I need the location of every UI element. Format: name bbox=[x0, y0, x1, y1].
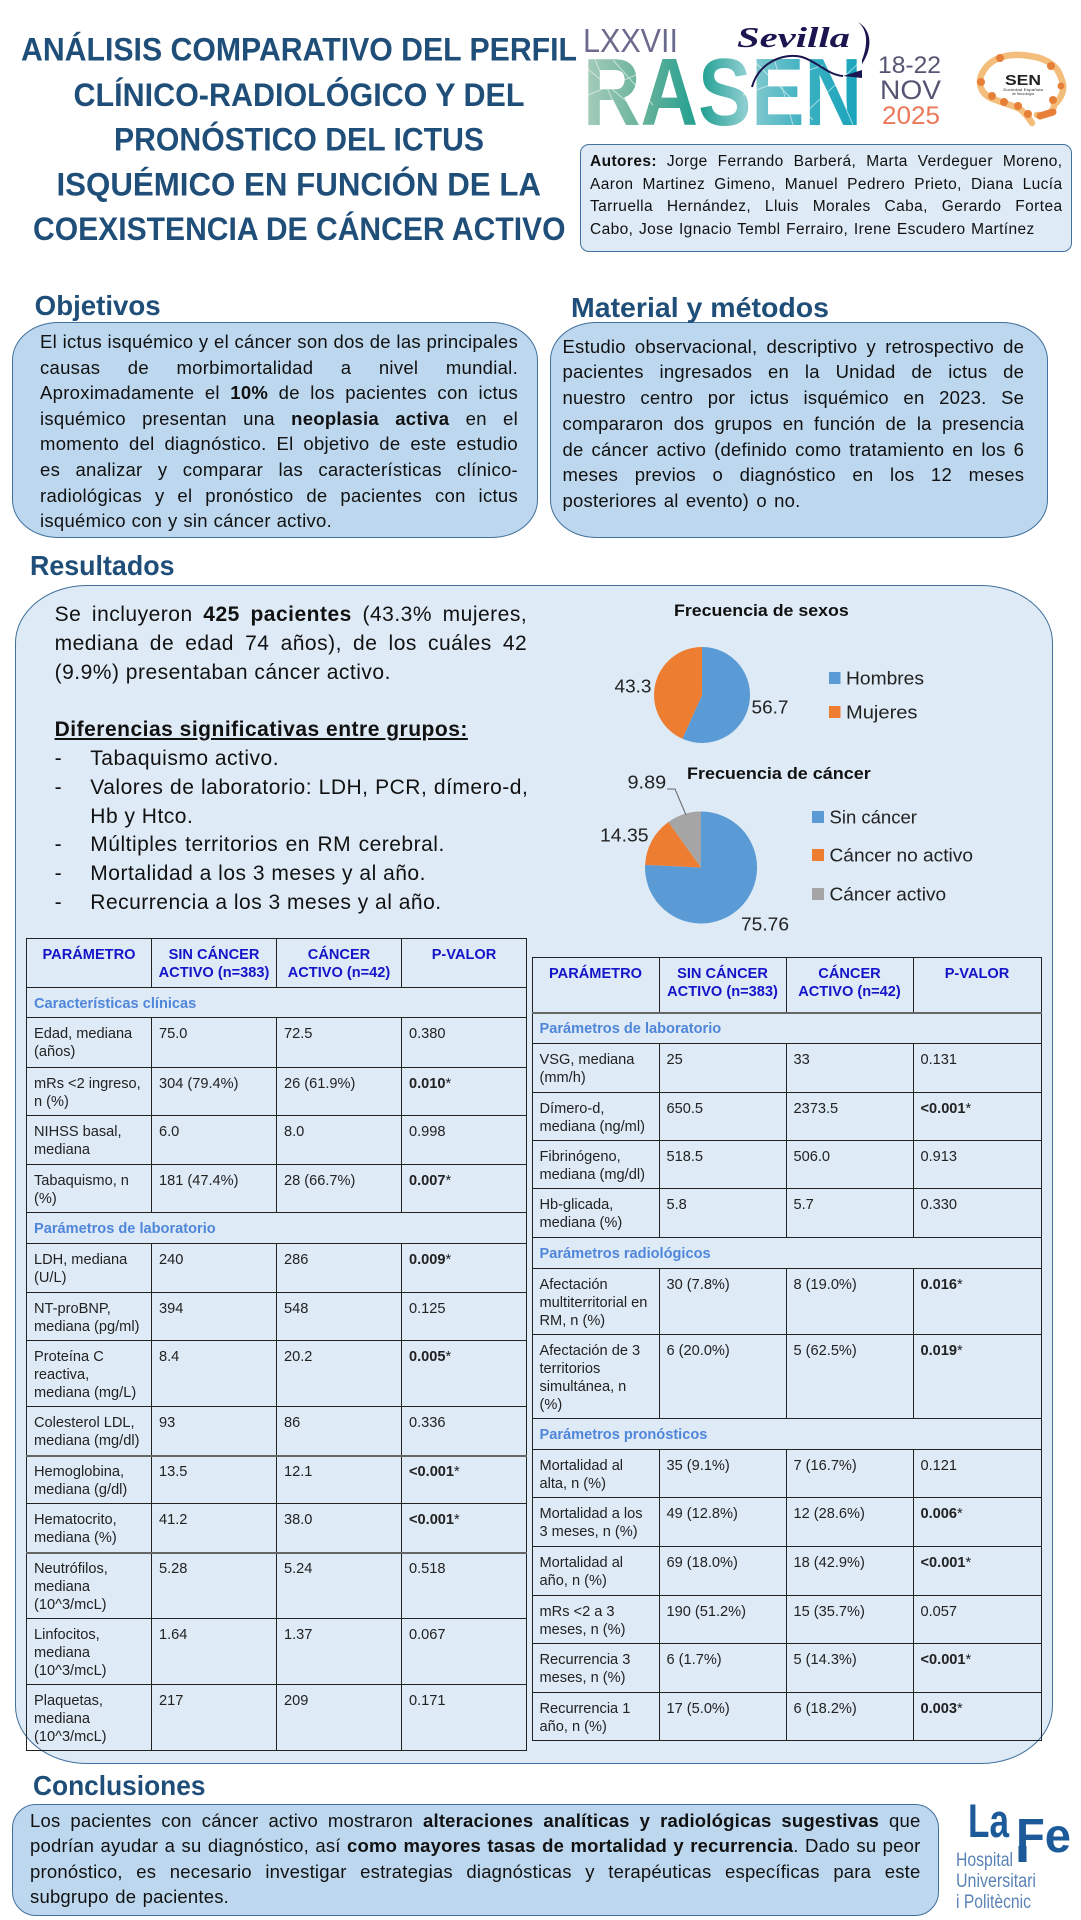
table: laboratorio, radiológicos y pronósticos: 25 bbox=[666, 1052, 683, 1068]
table: laboratorio, radiológicos y pronósticos: Fibrinógeno, bbox=[540, 1148, 621, 1164]
table: laboratorio, radiológicos y pronósticos: 15 (35.7%) bbox=[794, 1604, 865, 1620]
text: autores bbox=[590, 153, 1062, 238]
table: características clínicas y laboratorio: 41.2 bbox=[159, 1512, 187, 1528]
text: resumen de resultados: Valores de laboratorio: LDH, PCR, dímero-d, bbox=[90, 776, 528, 799]
text: autores: Cabo, Jose Ignacio Tembl Ferrairo, Irene Escudero Martínez bbox=[590, 220, 1035, 238]
table: laboratorio, radiológicos y pronósticos: 33 bbox=[794, 1052, 810, 1068]
table: laboratorio, radiológicos y pronósticos: 0.131 bbox=[920, 1052, 957, 1068]
heading: resultados: Resultados bbox=[30, 550, 174, 581]
text: resumen de resultados: Recurrencia a los 3 meses y al año. bbox=[90, 891, 442, 914]
text: resumen de resultados: Se incluyeron 425 pacientes (43.3% mujeres, bbox=[55, 603, 527, 626]
table: laboratorio, radiológicos y pronósticos: meses, n (%) bbox=[540, 1670, 625, 1686]
table: laboratorio, radiológicos y pronósticos: Parámetros radiológicos bbox=[540, 1246, 711, 1262]
table: características clínicas y laboratorio: mediana (mg/dl) bbox=[34, 1432, 139, 1448]
table: características clínicas y laboratorio: 5.28 bbox=[159, 1561, 187, 1577]
chart: frecuencia de cáncer: 75.76 bbox=[741, 914, 789, 934]
heading: material y métodos: Material y métodos bbox=[571, 292, 829, 323]
table: laboratorio, radiológicos y pronósticos: meses, n (%) bbox=[540, 1622, 625, 1638]
table: características clínicas y laboratorio: 0.380 bbox=[409, 1026, 446, 1042]
table: laboratorio, radiológicos y pronósticos: Mortalidad a los bbox=[540, 1506, 643, 1522]
chart: frecuencia de cáncer: Cáncer no activo bbox=[830, 846, 973, 866]
text: material y métodos: pacientes ingresados en la Unidad de ictus de bbox=[562, 361, 1024, 382]
text: resumen de resultados: Tabaquismo activo. bbox=[90, 747, 279, 770]
table: características clínicas y laboratorio: mediana (mg/L) bbox=[34, 1384, 136, 1400]
text: material y métodos: nuestro centro por ictus isquémico en 2023. Se bbox=[562, 387, 1024, 408]
table: características clínicas y laboratorio bbox=[26, 938, 527, 1751]
table: laboratorio, radiológicos y pronósticos: SIN CÁNCER bbox=[677, 966, 768, 982]
table: laboratorio, radiológicos y pronósticos: 69 (18.0%) bbox=[666, 1554, 738, 1570]
text: objetivos: Aproximadamente el 10% de los pacientes con ictus bbox=[40, 382, 518, 403]
text: resumen de resultados: - bbox=[55, 747, 62, 770]
table: laboratorio, radiológicos y pronósticos: 18 (42.9%) bbox=[794, 1554, 865, 1570]
table: características clínicas y laboratorio: 1.37 bbox=[284, 1626, 312, 1642]
table: características clínicas y laboratorio: Parámetros de laboratorio bbox=[34, 1220, 216, 1236]
table: laboratorio, radiológicos y pronósticos: 5.7 bbox=[794, 1196, 814, 1212]
table: características clínicas y laboratorio: 0.005* bbox=[409, 1348, 451, 1364]
table: características clínicas y laboratorio: 394 bbox=[159, 1300, 183, 1316]
table: laboratorio, radiológicos y pronósticos: 0.121 bbox=[920, 1458, 957, 1474]
text: autores: Autores: Jorge Ferrando Barberá, Marta Verdeguer Moreno, bbox=[590, 153, 1062, 170]
table: laboratorio, radiológicos y pronósticos: 30 (7.8%) bbox=[666, 1276, 730, 1292]
title: PRONÓSTICO DEL ICTUS bbox=[114, 122, 484, 158]
table: laboratorio, radiológicos y pronósticos: 7 (16.7%) bbox=[794, 1458, 857, 1474]
text: objetivos: es analizar y comparar las características clínico- bbox=[40, 459, 518, 480]
table: laboratorio, radiológicos y pronósticos: 8 (19.0%) bbox=[794, 1276, 857, 1292]
table: laboratorio, radiológicos y pronósticos: Recurrencia 3 bbox=[540, 1652, 630, 1668]
table: características clínicas y laboratorio: (U/L) bbox=[34, 1270, 66, 1286]
title: CLÍNICO-RADIOLÓGICO Y DEL bbox=[74, 77, 524, 113]
table: laboratorio, radiológicos y pronósticos: 17 (5.0%) bbox=[666, 1700, 730, 1716]
chart: frecuencia de sexos: 56.7 bbox=[752, 698, 788, 718]
table: características clínicas y laboratorio: 8.0 bbox=[284, 1124, 304, 1140]
chart: frecuencia de cáncer: Sin cáncer bbox=[830, 808, 917, 828]
text: conclusiones: subgrupo de pacientes. bbox=[30, 1886, 229, 1907]
table: características clínicas y laboratorio: mediana bbox=[34, 1579, 90, 1595]
table: características clínicas y laboratorio: P-VALOR bbox=[432, 946, 496, 962]
table: laboratorio, radiológicos y pronósticos: 0.003* bbox=[920, 1700, 963, 1716]
table: características clínicas y laboratorio: 240 bbox=[159, 1252, 183, 1268]
table: características clínicas y laboratorio: (10^3/mcL) bbox=[34, 1728, 107, 1744]
table: características clínicas y laboratorio: NT-proBNP, bbox=[34, 1300, 111, 1316]
table: laboratorio, radiológicos y pronósticos: VSG, mediana bbox=[540, 1052, 634, 1068]
table: características clínicas y laboratorio: 217 bbox=[159, 1692, 183, 1708]
text: resumen de resultados: Diferencias significativas entre grupos: bbox=[55, 718, 468, 741]
table: laboratorio, radiológicos y pronósticos: 12 (28.6%) bbox=[794, 1506, 865, 1522]
table: laboratorio, radiológicos y pronósticos: Dímero-d, bbox=[540, 1100, 604, 1116]
text: material y métodos: de cáncer activo (definido como tratamiento en los 6 bbox=[562, 438, 1024, 460]
table: laboratorio, radiológicos y pronósticos: (%) bbox=[540, 1396, 562, 1412]
text: conclusiones: Los pacientes con cáncer activo mostraron alteraciones analíticas y radiológicas sugestivas que bbox=[30, 1810, 920, 1831]
table: laboratorio, radiológicos y pronósticos: 2373.5 bbox=[794, 1100, 838, 1116]
heading: objetivos: Objetivos bbox=[35, 290, 161, 321]
table: laboratorio, radiológicos y pronósticos: PARÁMETRO bbox=[549, 966, 642, 982]
table: características clínicas y laboratorio: 20.2 bbox=[284, 1348, 312, 1364]
logo: fechas: 2025 bbox=[882, 102, 940, 130]
table: laboratorio, radiológicos y pronósticos: 0.016* bbox=[920, 1276, 963, 1292]
text: objetivos: isquémico con y sin cáncer activo. bbox=[40, 510, 332, 531]
table: características clínicas y laboratorio: Neutrófilos, bbox=[34, 1561, 108, 1577]
chart: frecuencia de cáncer: Cáncer activo bbox=[830, 884, 946, 904]
panel: objetivos bbox=[12, 322, 538, 538]
logo: La Fe: i Politècnic bbox=[956, 1892, 1031, 1913]
logo: LXXVII RASEN Sevilla: RASEN bbox=[583, 39, 862, 146]
table: laboratorio, radiológicos y pronósticos: ACTIVO (n=383) bbox=[667, 984, 778, 1000]
table: laboratorio, radiológicos y pronósticos: 5 (62.5%) bbox=[794, 1342, 857, 1358]
table: características clínicas y laboratorio: 0.125 bbox=[409, 1300, 446, 1316]
panel: autores bbox=[580, 144, 1072, 252]
logo: SEN: de Neurología bbox=[1012, 92, 1034, 96]
table: laboratorio, radiológicos y pronósticos: mediana (ng/ml) bbox=[540, 1118, 645, 1134]
text: conclusiones bbox=[30, 1810, 921, 1907]
logo: La Fe bbox=[956, 1794, 1071, 1913]
table: laboratorio, radiológicos y pronósticos: 6 (18.2%) bbox=[794, 1700, 857, 1716]
table: laboratorio, radiológicos y pronósticos: 650.5 bbox=[666, 1100, 703, 1116]
table: características clínicas y laboratorio: Colesterol LDL, bbox=[34, 1414, 135, 1430]
logo: SEN: Sociedad Española bbox=[1003, 88, 1043, 92]
table: características clínicas y laboratorio: 0.998 bbox=[409, 1124, 446, 1140]
table: características clínicas y laboratorio: (10^3/mcL) bbox=[34, 1662, 107, 1678]
table: características clínicas y laboratorio: 286 bbox=[284, 1252, 308, 1268]
chart: frecuencia de sexos bbox=[614, 602, 924, 743]
table: características clínicas y laboratorio: 26 (61.9%) bbox=[284, 1076, 355, 1092]
table: características clínicas y laboratorio: 72.5 bbox=[284, 1026, 312, 1042]
table: laboratorio, radiológicos y pronósticos: 3 meses, n (%) bbox=[540, 1524, 638, 1540]
chart: frecuencia de cáncer: 9.89 bbox=[628, 772, 666, 792]
text: conclusiones: pronóstico, es necesario investigar estrategias diagnósticas y terapéuticas específicas para este bbox=[30, 1861, 920, 1882]
table: laboratorio, radiológicos y pronósticos: alta, n (%) bbox=[540, 1476, 606, 1492]
table: características clínicas y laboratorio: Tabaquismo, n bbox=[34, 1172, 129, 1188]
table: características clínicas y laboratorio: (10^3/mcL) bbox=[34, 1597, 107, 1613]
table: características clínicas y laboratorio: (%) bbox=[34, 1190, 57, 1206]
chart: frecuencia de cáncer: Frecuencia de cáncer bbox=[687, 765, 871, 783]
text: resumen de resultados: Hb y Htco. bbox=[90, 805, 193, 828]
table: características clínicas y laboratorio: mediana bbox=[34, 1644, 90, 1660]
table: laboratorio, radiológicos y pronósticos: 0.057 bbox=[920, 1604, 957, 1620]
table: laboratorio, radiológicos y pronósticos: año, n (%) bbox=[540, 1718, 607, 1734]
table: laboratorio, radiológicos y pronósticos: <0.001* bbox=[920, 1652, 971, 1668]
table: laboratorio, radiológicos y pronósticos: Hb-glicada, bbox=[540, 1196, 613, 1212]
table: características clínicas y laboratorio: 28 (66.7%) bbox=[284, 1172, 355, 1188]
table: características clínicas y laboratorio: ACTIVO (n=383) bbox=[159, 964, 269, 980]
table: laboratorio, radiológicos y pronósticos: <0.001* bbox=[920, 1100, 971, 1116]
table: laboratorio, radiológicos y pronósticos: Afectación bbox=[540, 1276, 608, 1292]
title bbox=[21, 32, 577, 247]
table: laboratorio, radiológicos y pronósticos: 0.019* bbox=[920, 1342, 963, 1358]
table: características clínicas y laboratorio: mediana bbox=[34, 1710, 90, 1726]
table: características clínicas y laboratorio: 86 bbox=[284, 1414, 300, 1430]
table: laboratorio, radiológicos y pronósticos: 506.0 bbox=[794, 1148, 830, 1164]
text: resumen de resultados: - bbox=[55, 776, 62, 799]
table: laboratorio, radiológicos y pronósticos: simultánea, n bbox=[540, 1378, 626, 1394]
panel: conclusiones bbox=[12, 1804, 939, 1916]
table: características clínicas y laboratorio: LDH, mediana bbox=[34, 1252, 127, 1268]
chart: frecuencia de sexos: Mujeres bbox=[846, 702, 918, 722]
table: características clínicas y laboratorio: reactiva, bbox=[34, 1366, 89, 1382]
table: laboratorio, radiológicos y pronósticos: 518.5 bbox=[666, 1148, 703, 1164]
table: laboratorio, radiológicos y pronósticos: año, n (%) bbox=[540, 1572, 607, 1588]
table: características clínicas y laboratorio: 75.0 bbox=[159, 1026, 187, 1042]
table: características clínicas y laboratorio: NIHSS basal, bbox=[34, 1124, 122, 1140]
table: laboratorio, radiológicos y pronósticos: Mortalidad al bbox=[540, 1458, 623, 1474]
table: características clínicas y laboratorio: 0.010* bbox=[409, 1076, 451, 1092]
table: características clínicas y laboratorio: 304 (79.4%) bbox=[159, 1076, 239, 1092]
table: laboratorio, radiológicos y pronósticos: P-VALOR bbox=[945, 966, 1009, 982]
table: laboratorio, radiológicos y pronósticos: mediana (%) bbox=[540, 1214, 622, 1230]
table: laboratorio, radiológicos y pronósticos: 0.006* bbox=[920, 1506, 963, 1522]
table: laboratorio, radiológicos y pronósticos: Afectación de 3 bbox=[540, 1342, 640, 1358]
table: características clínicas y laboratorio: mediana (%) bbox=[34, 1530, 117, 1546]
table: características clínicas y laboratorio: SIN CÁNCER bbox=[169, 946, 259, 962]
table: características clínicas y laboratorio: 0.171 bbox=[409, 1692, 446, 1708]
table: características clínicas y laboratorio: CÁNCER bbox=[308, 946, 370, 962]
logo: SEN bbox=[977, 54, 1064, 123]
table: laboratorio, radiológicos y pronósticos: 190 (51.2%) bbox=[666, 1604, 746, 1620]
table: características clínicas y laboratorio: 8.4 bbox=[159, 1348, 179, 1364]
table: características clínicas y laboratorio: ACTIVO (n=42) bbox=[288, 964, 390, 980]
table: características clínicas y laboratorio: mRs <2 ingreso, bbox=[34, 1076, 141, 1092]
table: laboratorio, radiológicos y pronósticos: 6 (1.7%) bbox=[666, 1652, 722, 1668]
table: laboratorio, radiológicos y pronósticos: RM, n (%) bbox=[540, 1312, 605, 1328]
text: material y métodos: meses previos o diagnóstico en los 12 meses bbox=[562, 464, 1024, 485]
table: características clínicas y laboratorio: 209 bbox=[284, 1692, 308, 1708]
table: características clínicas y laboratorio: 0.067 bbox=[409, 1626, 446, 1642]
table: características clínicas y laboratorio: 12.1 bbox=[284, 1464, 312, 1480]
panel: material y métodos bbox=[550, 322, 1048, 538]
table: laboratorio, radiológicos y pronósticos: 5 (14.3%) bbox=[794, 1652, 857, 1668]
table: laboratorio, radiológicos y pronósticos: 49 (12.8%) bbox=[666, 1506, 738, 1522]
text: resumen de resultados bbox=[54, 603, 528, 914]
text: material y métodos: compararon dos grupos en función de la presencia bbox=[562, 413, 1024, 434]
chart: frecuencia de sexos: Hombres bbox=[846, 668, 924, 688]
table: características clínicas y laboratorio: Hemoglobina, bbox=[34, 1464, 124, 1480]
logo: La Fe: Fe bbox=[1016, 1810, 1071, 1863]
logo: La Fe: Hospital bbox=[956, 1850, 1013, 1871]
logo: fechas: NOV bbox=[880, 75, 941, 105]
title: ANÁLISIS COMPARATIVO DEL PERFIL bbox=[21, 32, 577, 68]
table: características clínicas y laboratorio: n (%) bbox=[34, 1094, 69, 1110]
table: características clínicas y laboratorio: mediana bbox=[34, 1142, 90, 1158]
title: COEXISTENCIA DE CÁNCER ACTIVO bbox=[33, 211, 566, 247]
table: características clínicas y laboratorio: mediana (pg/ml) bbox=[34, 1318, 139, 1334]
text: objetivos: El ictus isquémico y el cáncer son dos de las principales bbox=[40, 331, 518, 352]
table: laboratorio, radiológicos y pronósticos bbox=[532, 957, 1042, 1741]
table: laboratorio, radiológicos y pronósticos: 5.8 bbox=[666, 1196, 687, 1212]
table: características clínicas y laboratorio: Linfocitos, bbox=[34, 1626, 100, 1642]
table: características clínicas y laboratorio: 0.009* bbox=[409, 1252, 451, 1268]
table: características clínicas y laboratorio: <0.001* bbox=[409, 1512, 460, 1528]
table: características clínicas y laboratorio: 548 bbox=[284, 1300, 308, 1316]
table: laboratorio, radiológicos y pronósticos: 6 (20.0%) bbox=[666, 1342, 730, 1358]
text: resumen de resultados: (9.9%) presentaban cáncer activo. bbox=[55, 661, 391, 684]
table: laboratorio, radiológicos y pronósticos: <0.001* bbox=[920, 1554, 971, 1570]
table: laboratorio, radiológicos y pronósticos: mRs <2 a 3 bbox=[540, 1604, 615, 1620]
text: resumen de resultados: Mortalidad a los 3 meses y al año. bbox=[90, 862, 426, 885]
logo: LXXVII RASEN Sevilla: Sevilla bbox=[737, 22, 850, 54]
table: características clínicas y laboratorio: 13.5 bbox=[159, 1464, 187, 1480]
text: conclusiones: podrían ayudar a su diagnóstico, así como mayores tasas de mortalidad y recurrencia. Dado su peor bbox=[30, 1835, 921, 1856]
table: laboratorio, radiológicos y pronósticos: Parámetros de laboratorio bbox=[540, 1021, 721, 1037]
table: características clínicas y laboratorio: 0.336 bbox=[409, 1414, 446, 1430]
title: ISQUÉMICO EN FUNCIÓN DE LA bbox=[56, 166, 541, 202]
chart: frecuencia de sexos: 43.3 bbox=[614, 676, 652, 696]
text: objetivos: causas de morbimortalidad a nivel mundial. bbox=[40, 357, 518, 378]
table: características clínicas y laboratorio: 5.24 bbox=[284, 1561, 312, 1577]
text: material y métodos: Estudio observacional, descriptivo y retrospectivo de bbox=[562, 336, 1024, 356]
text: objetivos: momento del diagnóstico. El objetivo de este estudio bbox=[40, 433, 518, 454]
table: características clínicas y laboratorio: 6.0 bbox=[159, 1124, 179, 1140]
table: laboratorio, radiológicos y pronósticos: territorios bbox=[540, 1360, 600, 1376]
heading: conclusiones: Conclusiones bbox=[33, 1770, 206, 1801]
logo: LXXVII RASEN Sevilla: LXXVII bbox=[583, 22, 678, 59]
table: características clínicas y laboratorio: (años) bbox=[34, 1044, 75, 1060]
text: resumen de resultados: mediana de edad 74 años), de los cuáles 42 bbox=[55, 632, 527, 655]
chart: frecuencia de sexos: Frecuencia de sexos bbox=[674, 602, 849, 620]
panel: resultados bbox=[15, 585, 1052, 1764]
table: laboratorio, radiológicos y pronósticos: multiterritorial en bbox=[540, 1294, 647, 1310]
table: laboratorio, radiológicos y pronósticos: 35 (9.1%) bbox=[666, 1458, 730, 1474]
text: resumen de resultados: - bbox=[55, 833, 62, 856]
table: laboratorio, radiológicos y pronósticos: CÁNCER bbox=[818, 966, 881, 982]
table: características clínicas y laboratorio: 0.007* bbox=[409, 1172, 451, 1188]
table: laboratorio, radiológicos y pronósticos: Parámetros pronósticos bbox=[540, 1426, 707, 1442]
text: resumen de resultados: - bbox=[55, 862, 62, 885]
text: resumen de resultados: - bbox=[55, 891, 62, 914]
text: material y métodos bbox=[562, 336, 1024, 511]
table: laboratorio, radiológicos y pronósticos: 0.913 bbox=[920, 1148, 957, 1164]
table: características clínicas y laboratorio: Hematocrito, bbox=[34, 1512, 117, 1528]
text: objetivos bbox=[40, 331, 518, 531]
table: laboratorio, radiológicos y pronósticos: Recurrencia 1 bbox=[540, 1700, 630, 1716]
table: características clínicas y laboratorio: 0.518 bbox=[409, 1561, 446, 1577]
text: objetivos: radiológicas y el pronóstico de pacientes con ictus bbox=[40, 485, 518, 506]
text: resumen de resultados: Múltiples territorios en RM cerebral. bbox=[90, 833, 445, 856]
table: características clínicas y laboratorio: Proteína C bbox=[34, 1348, 104, 1364]
table: laboratorio, radiológicos y pronósticos: mediana (mg/dl) bbox=[540, 1166, 645, 1182]
table: laboratorio, radiológicos y pronósticos: Mortalidad al bbox=[540, 1554, 623, 1570]
table: laboratorio, radiológicos y pronósticos: (mm/h) bbox=[540, 1070, 586, 1086]
table: características clínicas y laboratorio: 181 (47.4%) bbox=[159, 1172, 239, 1188]
text: autores: Aaron Martinez Gimeno, Manuel Pedrero Prieto, Diana Lucía bbox=[590, 176, 1062, 192]
table: características clínicas y laboratorio: 1.64 bbox=[159, 1626, 187, 1642]
table: características clínicas y laboratorio: <0.001* bbox=[409, 1464, 460, 1480]
table: laboratorio, radiológicos y pronósticos: 0.330 bbox=[920, 1196, 957, 1212]
table: características clínicas y laboratorio: Plaquetas, bbox=[34, 1692, 103, 1708]
table: características clínicas y laboratorio: 93 bbox=[159, 1414, 175, 1430]
table: características clínicas y laboratorio: Características clínicas bbox=[34, 996, 196, 1012]
chart: frecuencia de cáncer: 14.35 bbox=[600, 826, 649, 846]
text: autores: Tarruella Hernández, Lluis Morales Caba, Gerardo Fortea bbox=[590, 198, 1062, 215]
logo: La Fe: La bbox=[968, 1794, 1010, 1847]
logo: fechas bbox=[878, 52, 941, 130]
table: características clínicas y laboratorio: mediana (g/dl) bbox=[34, 1482, 127, 1498]
logo: fechas: 18-22 bbox=[878, 52, 941, 79]
logo: SEN: SEN bbox=[1005, 72, 1041, 89]
table: características clínicas y laboratorio: PARÁMETRO bbox=[43, 946, 135, 962]
text: material y métodos: posteriores al evento) o no. bbox=[562, 490, 800, 511]
table: características clínicas y laboratorio: 38.0 bbox=[284, 1512, 312, 1528]
chart: frecuencia de cáncer bbox=[600, 765, 973, 934]
text: objetivos: isquémico presentan una neoplasia activa en el bbox=[40, 408, 518, 429]
table: laboratorio, radiológicos y pronósticos: ACTIVO (n=42) bbox=[798, 984, 901, 1000]
logo: La Fe: Universitari bbox=[956, 1871, 1036, 1892]
table: características clínicas y laboratorio: Edad, mediana bbox=[34, 1026, 132, 1042]
